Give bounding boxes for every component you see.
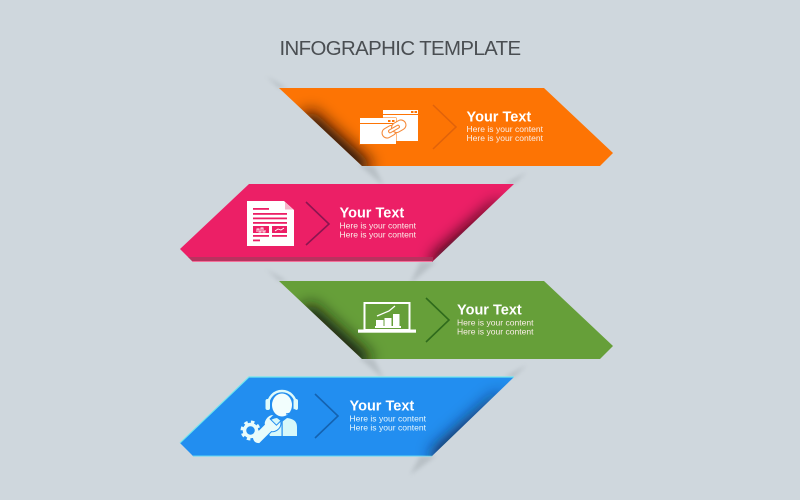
icon: document: [247, 201, 294, 246]
inner shadow: [188, 200, 506, 272]
text block: [457, 302, 534, 336]
text block: Here is your content: [457, 318, 534, 328]
text block: Here is your content: [457, 326, 534, 336]
inner shadow: [296, 110, 372, 176]
title: INFOGRAPHIC TEMPLATE: [279, 38, 521, 60]
arrow: chevron: [306, 202, 329, 245]
text block: Here is your content: [340, 220, 417, 230]
text block: [350, 398, 427, 432]
arrow: chevron: [315, 394, 338, 438]
text block: Your Text: [466, 110, 531, 126]
text block: Here is your content: [350, 422, 427, 432]
arrow: chevron: [433, 105, 456, 149]
arrow: chevron: [426, 298, 449, 342]
text block: Your Text: [350, 398, 414, 414]
text block: Here is your content: [340, 230, 417, 240]
text block: [466, 110, 544, 143]
inner shadow: [432, 393, 506, 466]
panel: orange step: [279, 88, 613, 166]
text block: Here is your content: [466, 124, 544, 134]
text block: Your Text: [457, 302, 522, 318]
inner shadow: [296, 303, 372, 369]
icon: linked browser windows: [359, 110, 418, 144]
panel: green step: [279, 281, 613, 359]
text block: Here is your content: [466, 133, 544, 143]
text block: Your Text: [340, 206, 404, 222]
icon: support agent with gear and wrench: [242, 391, 298, 448]
panel: pink step: [180, 184, 514, 262]
text block: [340, 206, 417, 240]
edge highlights: [180, 377, 514, 443]
panel: blue step: [180, 377, 514, 466]
icon: laptop chart: [358, 303, 416, 333]
text block: Here is your content: [350, 414, 427, 424]
fold shadows: [266, 76, 527, 475]
